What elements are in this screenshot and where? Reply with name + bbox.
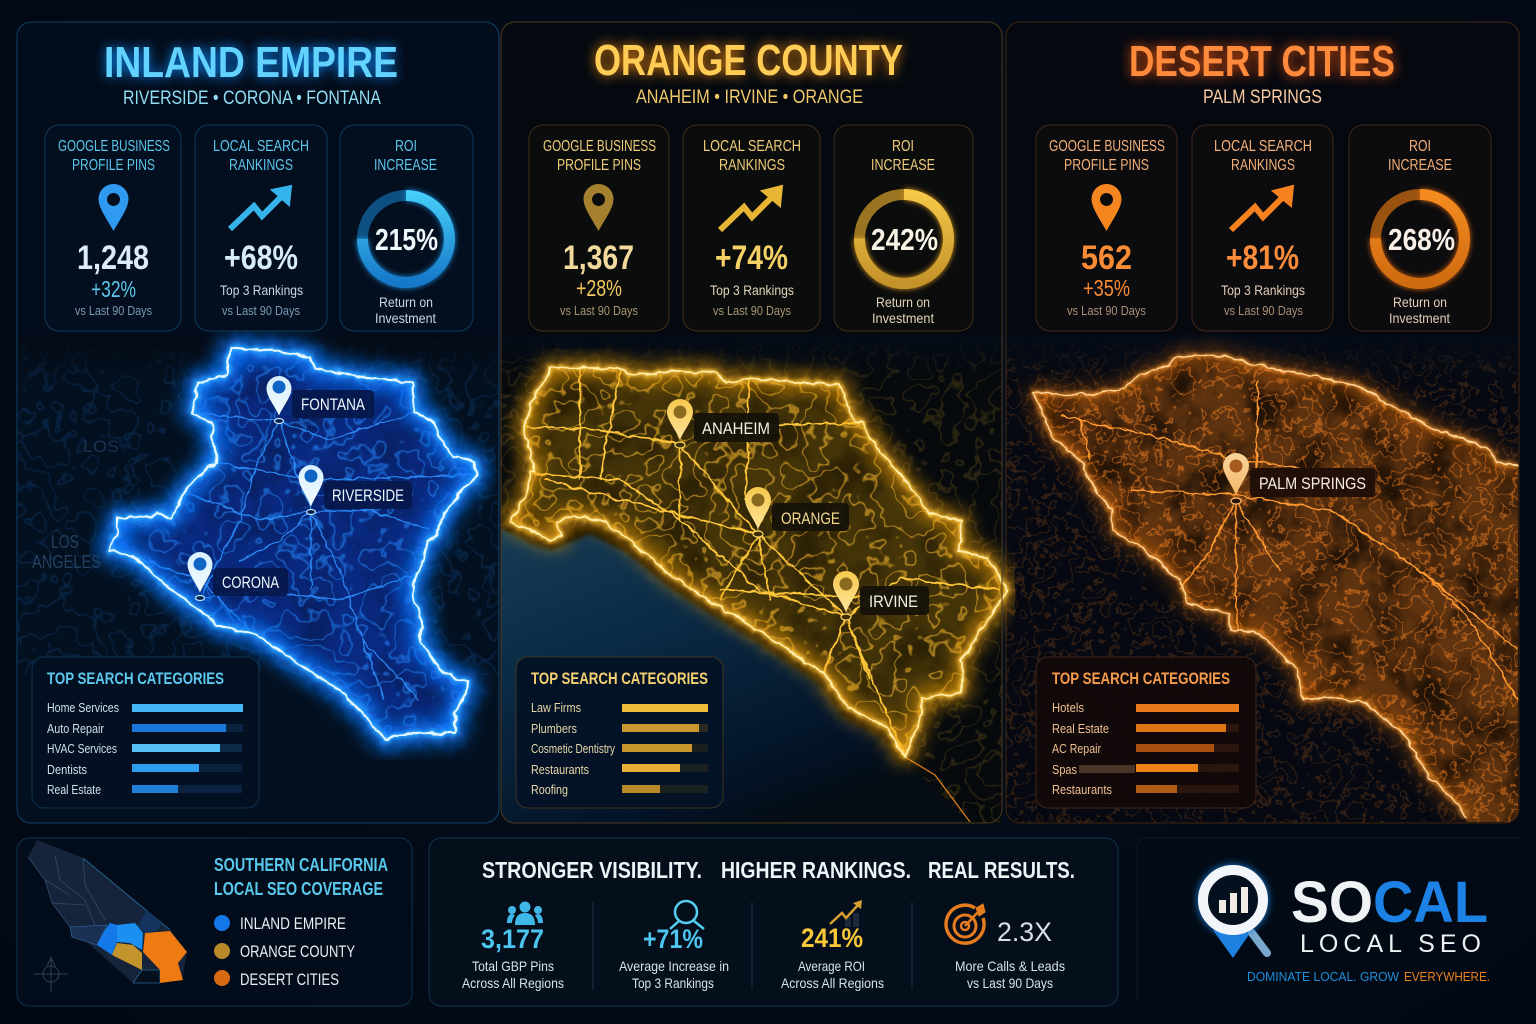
card: google business pins: GOOGLE BUSINESS xyxy=(1049,138,1165,155)
icon: magnifier pin xyxy=(1203,870,1267,958)
icon: rising arrow xyxy=(1231,186,1293,230)
heading: inland empire: INLAND EMPIRE xyxy=(104,38,398,87)
stat: average roi xyxy=(781,900,884,991)
stat: total gbp pins: Across All Regions xyxy=(462,975,564,991)
icon: target xyxy=(946,904,985,943)
card: local search rankings: RANKINGS xyxy=(229,157,293,174)
panel: top search categories orange: Plumbers xyxy=(531,721,577,736)
faint map label: los angeles: ANGELES xyxy=(32,552,101,572)
panel: top search categories inland: Auto Repair xyxy=(47,721,105,736)
card: local search rankings: vs Last 90 Days xyxy=(713,303,791,318)
card: google business pins: GOOGLE BUSINESS xyxy=(58,138,170,155)
logo wordmark: SO xyxy=(1291,870,1373,935)
logo wordmark: LOCAL SEO xyxy=(1300,930,1481,958)
heading: orange county: ORANGE COUNTY xyxy=(594,36,903,85)
legend: INLAND EMPIRE xyxy=(240,915,346,933)
card: local search rankings: RANKINGS xyxy=(719,157,785,174)
pin: irvine: IRVINE xyxy=(869,592,918,611)
faint map label: los angeles: LOS xyxy=(51,532,79,552)
panel: top search categories orange xyxy=(516,657,723,808)
card: roi increase: INCREASE xyxy=(1388,157,1452,174)
card: roi increase: ROI xyxy=(395,138,417,155)
panel: brand logo xyxy=(1137,838,1520,1000)
card: google business pins: +32% xyxy=(91,276,136,302)
pin: irvine xyxy=(833,571,929,620)
panel: top search categories inland: Real Estate xyxy=(47,782,101,797)
heading: stronger visibility: HIGHER RANKINGS. xyxy=(721,857,911,883)
card: roi increase: Investment xyxy=(1389,310,1450,326)
stat: average rankings increase: Average Increase in xyxy=(619,958,729,974)
icon: map pin xyxy=(98,184,129,231)
stat: total gbp pins xyxy=(462,902,564,991)
panel: top search categories inland: TOP SEARCH CATEGORIES xyxy=(47,670,224,688)
logo wordmark: CAL xyxy=(1373,870,1488,935)
legend: ORANGE COUNTY xyxy=(240,943,355,961)
panel: top search categories desert: Hotels xyxy=(1052,700,1084,715)
panel: orange county xyxy=(501,22,1010,823)
chart: roi ring 215% xyxy=(362,196,450,282)
icon: growth arrow xyxy=(830,900,862,927)
card: local search rankings xyxy=(683,125,820,331)
pin: palm springs xyxy=(1223,453,1375,504)
icon: map pin xyxy=(1092,184,1122,231)
tagline xyxy=(1247,969,1490,984)
panel: top search categories inland: HVAC Services xyxy=(47,741,117,756)
pin: riverside xyxy=(298,465,412,514)
subheading: palm springs: PALM SPRINGS xyxy=(1203,87,1322,108)
stat: more calls and leads xyxy=(946,904,1065,991)
panel: top search categories orange: Restaurants xyxy=(531,762,589,777)
map: inland empire xyxy=(18,332,498,760)
card: local search rankings: LOCAL SEARCH xyxy=(703,138,801,155)
card: google business pins: 1,367 xyxy=(563,239,634,277)
card: roi increase: Return on xyxy=(379,294,433,310)
panel: summary stats xyxy=(429,838,1118,1006)
card: roi increase: INCREASE xyxy=(871,157,935,174)
map: california overview xyxy=(28,840,187,983)
chart: roi ring 268% xyxy=(1376,194,1464,284)
card: local search rankings: +81% xyxy=(1226,239,1299,277)
card: local search rankings: Top 3 Rankings xyxy=(1221,282,1305,298)
panel: top search categories orange: Roofing xyxy=(531,782,568,797)
card: google business pins: vs Last 90 Days xyxy=(560,303,638,318)
icon: map pin xyxy=(584,184,614,231)
card: local search rankings xyxy=(1192,125,1333,331)
card: google business pins: 562 xyxy=(1081,239,1132,277)
card: roi increase: Return on xyxy=(1393,294,1447,310)
heading: stronger visibility: REAL RESULTS. xyxy=(928,857,1075,883)
stat: total gbp pins: 3,177 xyxy=(481,924,544,954)
card: local search rankings: RANKINGS xyxy=(1231,157,1295,174)
faint map label: los angeles: LOS xyxy=(83,437,119,456)
stat: average roi: 241% xyxy=(801,923,863,953)
card: roi increase: ROI xyxy=(1409,138,1431,155)
card: local search rankings: LOCAL SEARCH xyxy=(1214,138,1312,155)
card: roi increase: 242% xyxy=(871,222,938,257)
panel: top search categories inland: Home Services xyxy=(47,700,119,715)
card: roi increase: Investment xyxy=(375,310,436,326)
card: local search rankings: vs Last 90 Days xyxy=(1224,303,1303,318)
card: google business pins xyxy=(529,125,669,331)
card: google business pins xyxy=(1036,125,1177,331)
card: local search rankings: vs Last 90 Days xyxy=(222,303,300,318)
panel: southern california coverage xyxy=(17,838,412,1006)
panel: top search categories orange: Law Firms xyxy=(531,700,581,715)
pin: fontana xyxy=(266,376,374,424)
card: roi increase: Investment xyxy=(872,310,934,326)
stat: average roi: Across All Regions xyxy=(781,975,884,991)
pin: fontana: FONTANA xyxy=(301,395,366,414)
panel: top search categories desert xyxy=(1036,657,1256,808)
map: orange county xyxy=(501,335,1010,823)
heading: stronger visibility: STRONGER VISIBILITY. xyxy=(482,857,702,883)
stat: average rankings increase: Top 3 Rankings xyxy=(632,975,714,991)
stat: total gbp pins: Total GBP Pins xyxy=(472,958,554,974)
legend xyxy=(214,915,355,989)
heading: coverage: SOUTHERN CALIFORNIA xyxy=(214,854,388,875)
chart: roi ring 242% xyxy=(860,194,948,284)
panel: top search categories desert: AC Repair xyxy=(1052,741,1102,756)
panel: desert cities xyxy=(1006,22,1520,825)
card: roi increase: Return on xyxy=(876,294,930,310)
panel: top search categories desert: Spas xyxy=(1052,762,1077,777)
stat: average rankings increase xyxy=(619,901,729,991)
stat: more calls and leads: More Calls & Leads xyxy=(955,958,1065,974)
card: roi increase: 268% xyxy=(1388,222,1455,257)
card: roi increase xyxy=(834,125,973,331)
pin: anaheim xyxy=(667,399,779,448)
card: google business pins: PROFILE PINS xyxy=(1064,157,1149,174)
heading: coverage xyxy=(214,854,388,899)
panel: top search categories desert: TOP SEARCH CATEGORIES xyxy=(1052,670,1230,688)
card: roi increase xyxy=(1349,125,1491,331)
card: google business pins: GOOGLE BUSINESS xyxy=(543,138,656,155)
pin: corona xyxy=(188,552,288,600)
card: google business pins xyxy=(45,125,181,331)
pin: palm springs: PALM SPRINGS xyxy=(1259,474,1366,493)
card: roi increase: ROI xyxy=(892,138,914,155)
card: local search rankings: +68% xyxy=(224,239,298,277)
logo wordmark xyxy=(1291,870,1488,958)
heading: coverage: LOCAL SEO COVERAGE xyxy=(214,878,383,899)
card: local search rankings: Top 3 Rankings xyxy=(220,282,303,298)
card: google business pins: PROFILE PINS xyxy=(72,157,155,174)
icon: rising arrow xyxy=(230,186,291,229)
faint map label: los angeles xyxy=(32,437,119,572)
stat: more calls and leads: vs Last 90 Days xyxy=(967,975,1053,991)
card: local search rankings xyxy=(195,125,327,331)
heading: desert cities: DESERT CITIES xyxy=(1129,37,1395,86)
subheading: inland cities: RIVERSIDE • CORONA • FONTANA xyxy=(123,88,381,109)
panel: inland empire xyxy=(17,22,499,823)
stat: average roi: Average ROI xyxy=(798,958,865,974)
pin: orange xyxy=(745,487,849,537)
panel: top search categories orange: TOP SEARCH CATEGORIES xyxy=(531,670,708,688)
icon: rising arrow xyxy=(720,186,782,230)
pin: riverside: RIVERSIDE xyxy=(332,486,404,505)
pin: orange: ORANGE xyxy=(781,509,840,528)
pin: corona: CORONA xyxy=(222,573,279,592)
subheading: orange cities: ANAHEIM • IRVINE • ORANGE xyxy=(636,87,863,108)
card: roi increase: 215% xyxy=(375,222,438,257)
card: local search rankings: LOCAL SEARCH xyxy=(213,138,309,155)
tagline: EVERYWHERE. xyxy=(1404,969,1490,984)
card: local search rankings: Top 3 Rankings xyxy=(710,282,794,298)
map: desert cities xyxy=(1006,335,1520,825)
card: google business pins: PROFILE PINS xyxy=(557,157,641,174)
icon: magnifier xyxy=(670,901,704,929)
card: roi increase xyxy=(340,125,473,331)
card: google business pins: 1,248 xyxy=(77,239,149,277)
panel: top search categories desert: Real Estate xyxy=(1052,721,1109,736)
icon: people xyxy=(507,902,543,925)
panel: top search categories inland xyxy=(32,657,259,808)
legend: DESERT CITIES xyxy=(240,971,339,989)
heading: stronger visibility xyxy=(482,857,1075,883)
panel: top search categories inland: Dentists xyxy=(47,762,87,777)
icon: compass xyxy=(34,956,68,992)
panel: top search categories desert: Restaurants xyxy=(1052,782,1112,797)
pin: anaheim: ANAHEIM xyxy=(702,419,770,438)
panel: top search categories orange: Cosmetic Dentistry xyxy=(531,741,615,756)
card: google business pins: vs Last 90 Days xyxy=(75,303,152,318)
card: google business pins: +35% xyxy=(1083,275,1130,301)
card: google business pins: +28% xyxy=(576,275,622,301)
card: local search rankings: +74% xyxy=(715,239,788,277)
card: google business pins: vs Last 90 Days xyxy=(1067,303,1146,318)
stat: average rankings increase: +71% xyxy=(643,924,703,954)
card: roi increase: INCREASE xyxy=(374,157,437,174)
tagline: DOMINATE LOCAL. GROW xyxy=(1247,969,1400,984)
stat: more calls and leads: 2.3X xyxy=(997,917,1052,947)
